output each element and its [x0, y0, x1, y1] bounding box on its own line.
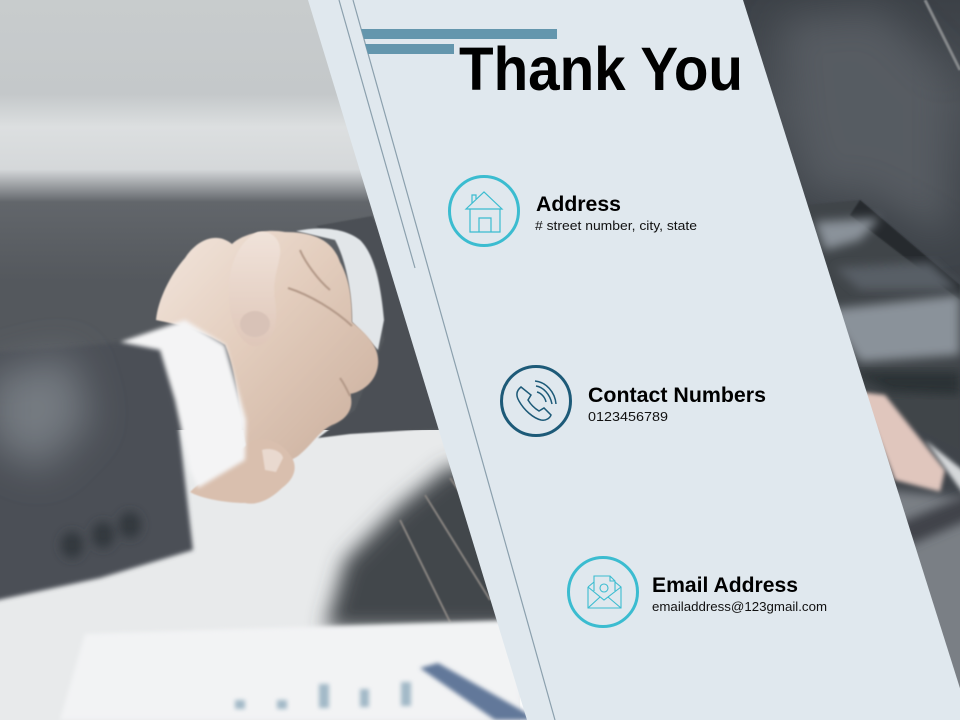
heading accent bars [361, 29, 557, 54]
address details: # street number, city, state [535, 219, 697, 233]
background right side [730, 0, 960, 720]
icon: house [450, 176, 518, 246]
clasped hands [156, 231, 378, 504]
contact item: phone [502, 366, 766, 436]
light diagonal panel [308, 0, 960, 720]
phone number: 0123456789 [588, 410, 668, 424]
icon: envelope [568, 558, 638, 626]
icon: phone [502, 366, 570, 436]
left jacket sleeve [0, 342, 193, 606]
contact numbers heading: Contact Numbers [588, 384, 766, 407]
title: Thank You [459, 35, 743, 103]
document on table [60, 620, 530, 720]
email heading: Email Address [652, 574, 798, 597]
email value: emailaddress@123gmail.com [652, 600, 827, 614]
diagonal accent lines [339, 0, 555, 720]
contact item: email [568, 558, 827, 626]
address heading: Address [536, 193, 621, 216]
right sleeve [316, 216, 445, 438]
contact item: address [450, 176, 697, 246]
right shirt cuff [296, 228, 384, 350]
white left shirt cuff [120, 320, 246, 488]
table surface [0, 430, 520, 720]
